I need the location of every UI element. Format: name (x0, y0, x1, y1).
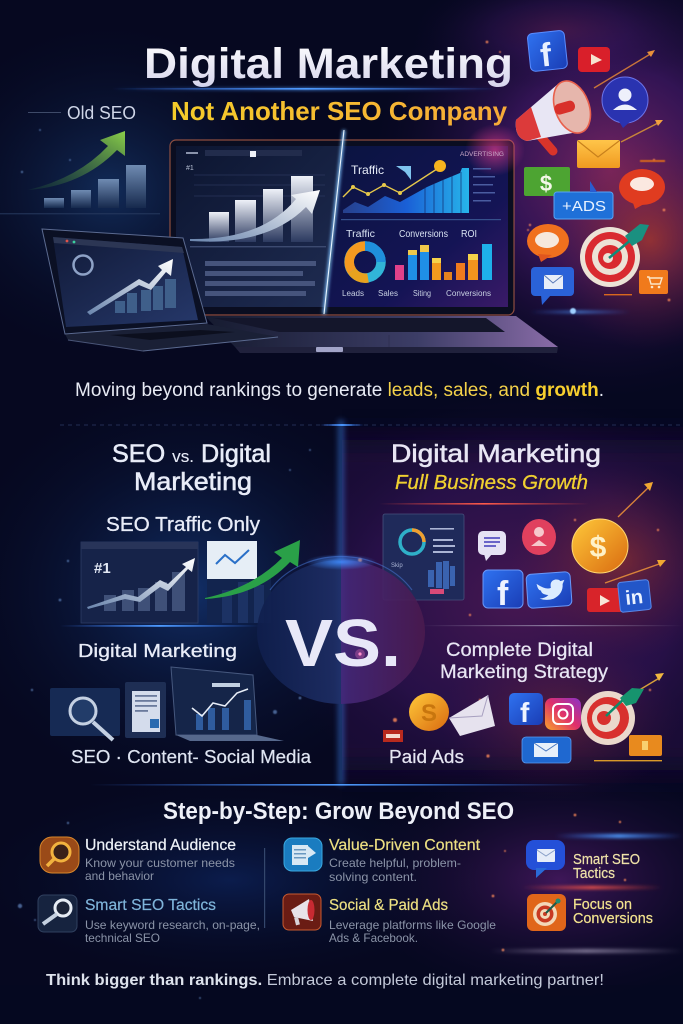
caption: Paid Ads (389, 747, 464, 767)
icon: mail (522, 737, 571, 763)
screen: marketing dashboard: ADVERTISING (460, 151, 504, 158)
icon: target (581, 688, 644, 745)
icon: facebook (527, 30, 568, 75)
icon: youtube (578, 47, 610, 72)
icon: ads badge: +ADS (562, 198, 606, 215)
old SEO bar chart with green arrow (0, 131, 160, 214)
tagline: Moving beyond rankings to generate leads, sales, and growth. (75, 380, 604, 401)
section frame lines (60, 420, 683, 786)
panel: digital marketing tools (lower left) (50, 641, 312, 767)
small laptop (42, 229, 278, 351)
heading: Marketing (134, 468, 252, 496)
icon: dollar coin (572, 519, 628, 573)
underline streak (594, 760, 662, 761)
icon: chat mail (526, 840, 565, 878)
icon: instagram (545, 698, 581, 730)
screen: marketing dashboard (327, 124, 525, 307)
icon: user pin (522, 519, 556, 555)
icon: linkedin (618, 579, 651, 612)
step: smart SEO tactics: technical SEO (85, 931, 160, 945)
icon: facebook: f (497, 575, 509, 613)
icon: document (284, 838, 322, 871)
label: old SEO (28, 103, 136, 123)
icon: small orange chart tile (629, 735, 662, 756)
icon: facebook: f (538, 36, 554, 74)
caption: SEO · Content- Social Media (71, 747, 312, 767)
icon: target with arrow (580, 224, 649, 287)
icon: megaphone (283, 894, 321, 930)
subheading (440, 640, 609, 683)
subheading: Digital Marketing (78, 641, 237, 661)
heading: Digital Marketing (391, 440, 601, 468)
screen: marketing dashboard: Sales (378, 289, 398, 298)
screen: marketing dashboard: Conversions (399, 229, 448, 240)
screen: marketing dashboard: Conversions (446, 289, 491, 298)
donut chart (349, 246, 381, 278)
screen: marketing dashboard: Traffic (351, 163, 384, 177)
heading: SEO vs. Digital (112, 440, 271, 468)
step: value-driven content: Value-Driven Content (329, 837, 481, 854)
icon: dollar tag: $ (540, 171, 552, 196)
step: social and paid ads: Ads & Facebook. (329, 931, 418, 945)
step: focus on conversions: Focus on (573, 897, 632, 913)
icon: twitter (526, 572, 572, 608)
icon: facebook (483, 570, 523, 613)
step: understand audience (40, 837, 236, 883)
icon: red chat bubble (619, 169, 665, 209)
panel: complete strategy (lower right) (383, 640, 664, 767)
heading (112, 440, 271, 496)
laptop frame (170, 140, 514, 315)
chart panel: ranking: #1 (94, 560, 111, 577)
icon: envelope (577, 140, 620, 168)
subtitle: Not Another SEO Company (171, 96, 508, 126)
icon: chat (478, 531, 506, 561)
social and marketing icon cluster (516, 30, 668, 314)
screen: marketing dashboard: Leads (342, 289, 364, 298)
step: smart SEO tactics (chat): Tactics (573, 866, 615, 882)
divider (420, 625, 683, 626)
label: old SEO: Old SEO (67, 103, 136, 123)
icon: dollar tag (524, 167, 570, 196)
arrow: social up (605, 560, 666, 583)
title: Digital Marketing (144, 40, 513, 88)
step: social and paid ads (283, 894, 496, 945)
dashboard card (383, 514, 464, 600)
icon: ads badge (554, 181, 613, 219)
step: smart SEO tactics: Use keyword research, on-page, (85, 918, 260, 932)
step: understand audience: Know your customer needs (85, 856, 235, 870)
icon: youtube (587, 588, 623, 612)
screen: marketing dashboard: ROI (461, 229, 477, 240)
steps heading: Step-by-Step: Grow Beyond SEO (163, 798, 514, 825)
icon: laptop analytics (171, 667, 284, 741)
divider (379, 503, 589, 505)
icon: envelope (449, 695, 495, 736)
arrow: upper orange (594, 50, 655, 88)
icon: gold coin: S (421, 700, 437, 727)
step: smart SEO tactics: Smart SEO Tactics (85, 897, 216, 914)
step: smart SEO tactics (38, 895, 260, 945)
screen: SEO rankings: #1 (186, 165, 194, 172)
step: smart SEO tactics (chat) (526, 840, 640, 882)
divider between step columns (264, 848, 265, 928)
step: understand audience: and behavior (85, 869, 154, 883)
icon: linkedin: in (624, 586, 644, 610)
step: social and paid ads: Leverage platforms like Google (329, 918, 496, 932)
icon: key search (38, 895, 77, 932)
decorative right streaks (490, 834, 683, 953)
arrow: target up (636, 673, 664, 692)
icon: facebook (509, 693, 543, 728)
laptop base (205, 316, 558, 353)
icon: magnifier on panel (50, 688, 120, 740)
subheading: Marketing Strategy (440, 662, 609, 683)
divider (60, 625, 260, 627)
subheading: full business growth: Full Business Growth (395, 472, 588, 494)
chart panel: ranking (81, 542, 198, 623)
screen: SEO rankings (176, 146, 341, 307)
dashboard bars (395, 244, 492, 280)
icon: gold coin (409, 693, 449, 731)
icon: mail bubble (531, 267, 574, 305)
icon: small red tag (383, 730, 403, 742)
VS badge (257, 554, 425, 704)
icon: user bubble (602, 77, 648, 128)
icon: dollar coin: $ (590, 531, 607, 564)
icon: magnifier (40, 837, 79, 873)
big laptop (170, 124, 558, 353)
icon: target (527, 894, 566, 931)
blue particles (18, 129, 311, 999)
starfield particles (358, 41, 670, 951)
screen: marketing dashboard: Siting (413, 289, 431, 298)
step: smart SEO tactics (chat): Smart SEO (573, 852, 640, 868)
step: value-driven content: Create helpful, problem- (329, 856, 461, 870)
card: traffic zigzag with green arrow (205, 540, 300, 623)
subheading: SEO traffic only: SEO Traffic Only (106, 514, 260, 536)
icon: facebook: f (520, 697, 530, 728)
arrow: middle orange (621, 120, 663, 142)
title underline (112, 88, 500, 90)
VS badge: VS. (285, 606, 401, 681)
light divider on screen (324, 130, 344, 314)
panel: digital marketing (right) (379, 440, 683, 626)
closing line: Think bigger than rankings. Embrace a complete digital marketing partner! (46, 972, 604, 989)
icon: shopping cart (639, 270, 668, 294)
step: social and paid ads: Social & Paid Ads (329, 897, 448, 914)
step: value-driven content (284, 837, 481, 884)
dashboard card: Skip (391, 563, 403, 569)
icon: megaphone (516, 76, 597, 151)
step: focus on conversions (527, 894, 653, 931)
screen: marketing dashboard: Traffic (346, 229, 375, 240)
step: value-driven content: solving content. (329, 870, 417, 884)
icon: content document (125, 682, 166, 738)
base glow (530, 160, 665, 314)
step: focus on conversions: Conversions (573, 911, 653, 927)
arrow: coin up (618, 482, 653, 517)
panel: SEO vs digital marketing (left) (60, 440, 300, 627)
icon: orange chat bubble (527, 224, 569, 262)
step: understand audience: Understand Audience (85, 837, 236, 854)
subheading: Complete Digital (446, 640, 593, 661)
